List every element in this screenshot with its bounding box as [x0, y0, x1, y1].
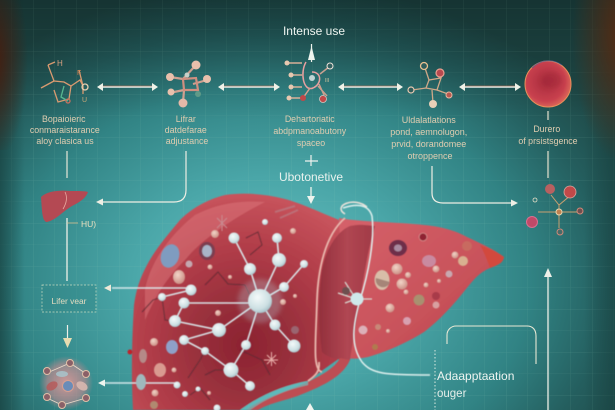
arrow: molecule 2 to molecule 3 — [218, 83, 280, 91]
stent tube and connector — [308, 202, 430, 381]
text: liver adjustment: Lifrar — [176, 114, 196, 124]
text: absorption process: Dehartoriatic — [285, 114, 335, 124]
text: dependence description: otroppence — [407, 151, 453, 161]
text: liver adjustment: adjustance — [166, 136, 208, 146]
right lobe — [339, 218, 504, 359]
elbow arrow: dependence to molecule 5 — [432, 166, 518, 206]
arrow: down to liver — [307, 187, 315, 204]
left lobe — [132, 194, 352, 410]
top label: intense use: Intense use — [283, 24, 345, 38]
text: substance description: conmaraistarance — [30, 125, 100, 135]
label: ubotonetive: Ubotonetive — [279, 170, 343, 184]
arrow: molecule to dashed box — [104, 284, 111, 292]
arrow: bottom up — [306, 403, 314, 410]
text: liver adjustment: datdefarae — [165, 125, 207, 135]
dashed box: liver year: Lifer vear — [52, 296, 87, 306]
molecule 2: ball-and-stick — [166, 60, 211, 108]
arrow: molecule 1 to molecule 2 — [97, 83, 158, 91]
textured band — [319, 225, 375, 360]
cluster icon: small cell network — [39, 356, 93, 410]
text: dependence description: Uldalatlations — [402, 115, 456, 125]
bile duct — [246, 358, 350, 410]
right lobe tip — [480, 245, 504, 268]
arrow: molecule 4 to sphere — [459, 83, 521, 91]
text: substance description: aloy clasica us — [36, 136, 94, 146]
vertical line: left column — [67, 151, 78, 281]
molecule 1: chemical structure — [41, 59, 88, 104]
connector node — [338, 282, 372, 306]
red sphere: cell — [525, 61, 571, 107]
text: dependence description: prvid, dorandomee — [391, 139, 466, 149]
connector: persistence to molecule 5 — [547, 151, 549, 178]
molecule 1: chemical structure: U — [82, 97, 87, 104]
teal gap — [240, 381, 308, 410]
molecule 1: chemical structure: H — [57, 59, 63, 68]
liver spots and lesions — [128, 206, 472, 409]
label: HU: HU) — [81, 219, 96, 229]
dotted line: adaptation — [434, 350, 436, 410]
label: ouger: ouger — [437, 388, 467, 400]
small liver icon — [41, 191, 88, 222]
molecule 4 — [408, 62, 452, 108]
label: adaptation: Adaapptaation — [437, 369, 514, 383]
left lobe highlight — [145, 202, 265, 320]
text: substance description: Bopaioieric — [42, 114, 86, 124]
text: dependence description: pond, aemnolugon, — [390, 127, 467, 137]
connector: sphere to label — [547, 111, 549, 120]
arrow: dashed box to small network — [63, 325, 72, 348]
plus sign — [305, 155, 318, 166]
molecule 3: central compound: III — [325, 78, 329, 84]
adaptation outline — [447, 326, 536, 364]
molecule 1: chemical structure: F — [77, 70, 81, 77]
arrow: upward right column — [544, 268, 552, 410]
liver illustration — [132, 194, 504, 410]
text: duration of persistence: Durero — [533, 124, 560, 134]
molecule 3: central compound — [284, 60, 333, 102]
dashed box: liver year — [42, 285, 96, 312]
elbow arrow: liver adjustment to small liver — [96, 151, 186, 206]
molecule network on liver — [104, 219, 308, 410]
molecule 5 — [526, 184, 583, 235]
arrow: liver to cluster — [98, 380, 105, 386]
arrow: molecule 3 to molecule 4 — [338, 83, 403, 91]
nodes — [158, 219, 308, 410]
dark lines — [142, 232, 270, 400]
glow around hub — [238, 279, 282, 323]
text: absorption process: abdpmanoabutony — [273, 126, 347, 136]
text: duration of persistence: of prsistsgence — [518, 136, 578, 146]
hub centre — [309, 75, 315, 81]
white bonds — [104, 238, 304, 386]
arrow: intense use down — [308, 44, 315, 62]
text: absorption process: spaceo — [297, 138, 325, 148]
right lobe spots — [389, 240, 407, 256]
